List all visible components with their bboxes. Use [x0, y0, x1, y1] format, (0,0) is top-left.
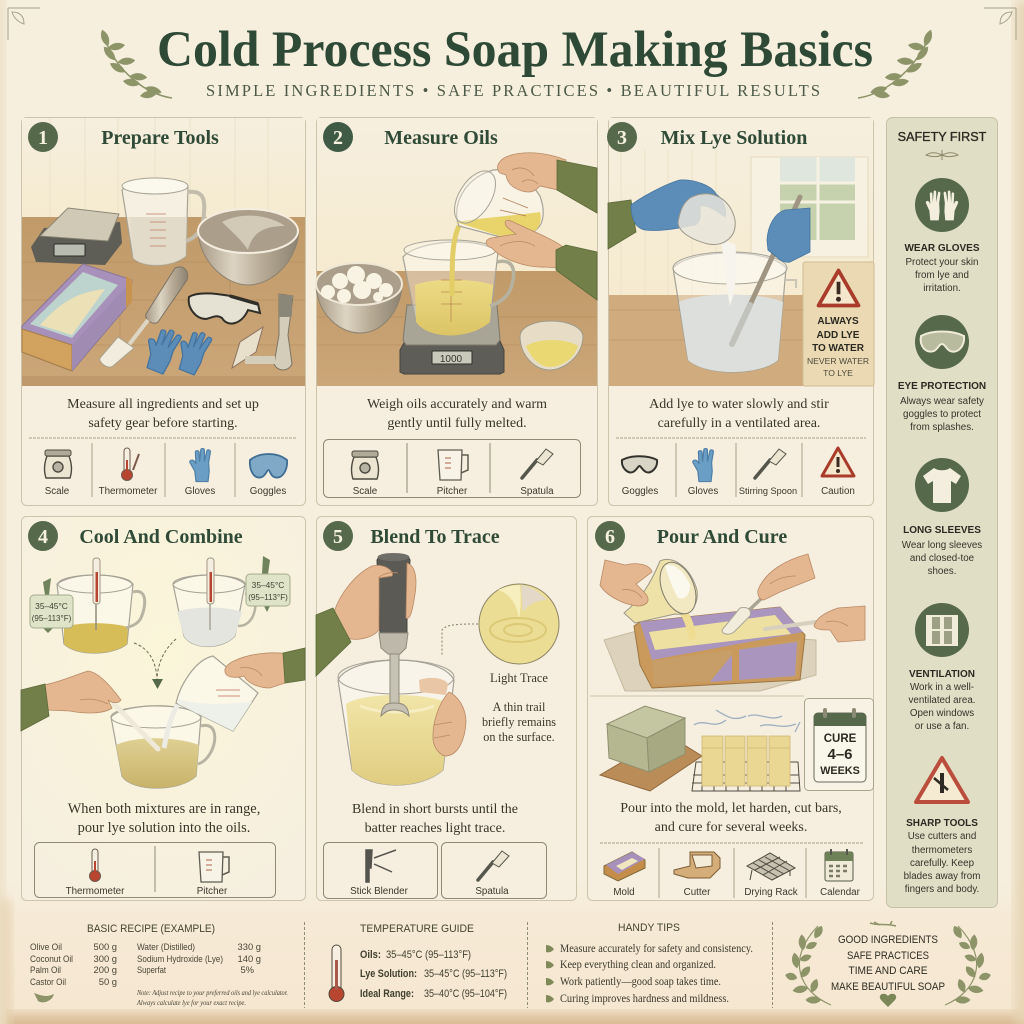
temperature ranges: Lye Solution: [360, 968, 417, 980]
measuring pitcher [403, 242, 498, 336]
section dividers [304, 922, 772, 1008]
caption: and cure for several weeks. [655, 820, 807, 835]
heading: Pour And Cure [657, 526, 787, 548]
temperature ranges: Ideal Range: [360, 988, 414, 1000]
oil stream [452, 226, 459, 296]
panel: safety first [886, 118, 998, 908]
caption: Blend in short bursts until the [352, 802, 518, 817]
oils list: 300 g [94, 953, 117, 964]
right glove [767, 208, 810, 262]
arrows [134, 639, 176, 689]
temperature ranges [360, 949, 507, 1000]
oils list: Castor Oil [30, 976, 66, 987]
illustration: weighing oil: 1000 [440, 354, 463, 365]
goggles [189, 293, 260, 324]
caption: When both mixtures are in range, [68, 801, 260, 817]
ornament [926, 150, 958, 160]
inset: light trace [479, 584, 559, 664]
tool row: Thermometer [66, 886, 125, 897]
stick blender [146, 267, 188, 323]
window [751, 157, 868, 257]
callout: always add lye to water [803, 262, 874, 386]
heading: Blend To Trace [370, 526, 500, 548]
heading: Mix Lye Solution [661, 127, 807, 149]
caption [67, 397, 259, 431]
safety: long sleeves: shoes. [928, 566, 956, 577]
wooden board [600, 735, 702, 791]
oils list: 200 g [94, 964, 117, 975]
lye pitcher [173, 575, 245, 646]
tool row [324, 842, 546, 898]
icon: thermometer [329, 945, 344, 1002]
step number 6: 6 [605, 526, 615, 548]
safety: eye protection: goggles to protect [903, 409, 981, 420]
pouring pitcher [624, 559, 697, 623]
tool row: Mold [613, 887, 635, 898]
icon: window ventilation [915, 603, 969, 657]
text: light trace: A thin trail [493, 700, 546, 714]
calendar: cure 4-6 weeks: WEEKS [820, 765, 860, 777]
pitcher [122, 179, 188, 265]
lye list: Water (Distilled) [137, 941, 195, 952]
safety: long sleeves [902, 525, 982, 577]
tool row: Pitcher [437, 486, 468, 497]
corner ornaments [8, 8, 1016, 40]
illustration: pouring into mold [600, 554, 865, 691]
panel: step 5 blend to trace [316, 516, 576, 900]
tips list [546, 943, 753, 1005]
sleeves [556, 160, 597, 300]
safety: long sleeves: and closed-toe [910, 553, 975, 564]
lower hand [486, 220, 563, 268]
lye list: Sodium Hydroxide (Lye) [137, 953, 223, 964]
safety: long sleeves: Wear long sleeves [902, 540, 982, 551]
small tools [274, 294, 293, 370]
laurel: title right [858, 29, 934, 99]
safety: wear gloves: Protect your skin [906, 257, 978, 268]
temperature tag right: 35–45°C [252, 580, 284, 590]
illustration: stick blender [316, 553, 559, 785]
caption: batter reaches light trace. [365, 821, 505, 836]
tool row: Spatula [520, 486, 554, 497]
small bowl of oil [520, 321, 583, 370]
safety: ventilation: ventilated area. [908, 695, 976, 706]
text: light trace: Light Trace [490, 671, 548, 685]
section: closing message: GOOD INGREDIENTS [838, 934, 938, 946]
section: closing message: MAKE BEAUTIFUL SOAP [831, 981, 945, 993]
panel: step 2 measure oils [316, 118, 598, 506]
tool row: Thermometer [99, 486, 158, 497]
mixing pitcher [111, 706, 201, 788]
steam squiggles [694, 710, 800, 732]
tool row: Pitcher [197, 886, 228, 897]
tool row: Gloves [185, 486, 215, 497]
pouring pitcher [457, 170, 543, 240]
step number 6 [595, 521, 625, 551]
illustration: weighing oil [316, 118, 597, 386]
recipe note: Always calculate lye for your exact recipe. [136, 999, 246, 1007]
section: closing message: TIME AND CARE [848, 965, 928, 977]
laurel: title left [99, 29, 172, 99]
tool row [324, 440, 580, 498]
safety: sharp tools [904, 818, 980, 895]
safety: sharp tools: Use cutters and [908, 831, 976, 842]
step number 2 [323, 122, 353, 152]
safety: ventilation [908, 669, 976, 732]
temperature tag right: (95–113°F) [248, 593, 288, 602]
lye stream [164, 704, 178, 748]
oils list: Coconut Oil [30, 953, 73, 964]
left hand [44, 671, 121, 713]
caption: Weigh oils accurately and warm [367, 397, 547, 412]
right hand [419, 678, 466, 756]
powder stream [721, 240, 736, 306]
caption: gently until fully melted. [387, 416, 527, 431]
dashed pointer [442, 624, 478, 656]
beaker of batter [338, 660, 454, 785]
callout: always add lye to water: ADD LYE [817, 330, 860, 341]
illustration: curing bars [600, 706, 800, 791]
caption: Measure all ingredients and set up [67, 397, 259, 412]
tips list: Measure accurately for safety and consistency. [560, 943, 753, 955]
oils list: Palm Oil [30, 964, 61, 975]
third hand and rod [765, 606, 865, 642]
recipe note: Note: Adjust recipe to your preferred oils and lye calculator. [136, 989, 288, 997]
illustration: combining mixtures [21, 556, 305, 788]
panel: step 4 cool and combine [21, 516, 306, 900]
tool row: Stirring Spoon [739, 486, 797, 496]
step number 2: 2 [333, 127, 343, 149]
left hand [600, 560, 652, 606]
icon: long sleeves shirt [915, 458, 969, 512]
tool row: Goggles [622, 486, 658, 497]
calendar: cure 4-6 weeks [804, 698, 874, 790]
caption: pour lye solution into the oils. [78, 820, 250, 836]
calendar: cure 4-6 weeks: CURE [824, 733, 857, 745]
step number 5: 5 [333, 526, 343, 548]
safety: sharp tools: fingers and body. [905, 884, 979, 895]
mold [22, 264, 132, 371]
calendar: cure 4-6 weeks: 4–6 [827, 746, 853, 763]
soap block [607, 706, 685, 772]
board [604, 630, 816, 691]
safety: eye protection [898, 381, 986, 433]
left hand [334, 563, 416, 639]
caption [68, 801, 260, 836]
safety: sharp tools: thermometers [912, 845, 972, 856]
tips list: Keep everything clean and organized. [560, 959, 716, 971]
laurel left [785, 925, 831, 1005]
left sleeve [21, 684, 49, 731]
lye list [137, 941, 261, 975]
safety: eye protection: from splashes. [910, 422, 974, 433]
oil pitcher [57, 575, 133, 653]
illustration: mixing lye [608, 118, 873, 386]
soap bars [702, 736, 790, 786]
step number 5 [323, 521, 353, 551]
panel: step 1 prepare tools [22, 118, 306, 506]
temperature tag left: 35–45°C [35, 601, 68, 611]
section: temperature guide [329, 923, 507, 1002]
tool row: Caution [821, 486, 855, 497]
bowl of solid oils [316, 286, 402, 333]
icon: sharp tools warning [916, 758, 968, 802]
step number 3: 3 [617, 127, 627, 149]
tool row [616, 438, 866, 497]
tips list: Work patiently—good soap takes time. [560, 976, 721, 988]
temperature tag left: (95–113°F) [32, 614, 72, 623]
temperature tag left [30, 578, 73, 633]
tool row [29, 438, 297, 497]
callout: always add lye to water: TO LYE [823, 368, 853, 378]
safety: ventilation: VENTILATION [909, 669, 975, 680]
text: light trace [482, 671, 556, 744]
safety: ventilation: Work in a well- [910, 682, 974, 693]
temperature ranges: Oils: [360, 949, 381, 961]
lye cup [678, 194, 735, 244]
caption [620, 801, 842, 835]
safety: eye protection: EYE PROTECTION [898, 381, 986, 392]
temperature ranges: 35–45°C (95–113°F) [386, 949, 471, 961]
spoon [732, 197, 800, 344]
caption [649, 397, 829, 431]
panel: step 3 mix lye [607, 118, 874, 506]
temperature ranges: 35–45°C (95–113°F) [424, 968, 507, 980]
sprig ornament [870, 921, 896, 926]
subtitle: SIMPLE INGREDIENTS • SAFE PRACTICES • BEAUTIFUL RESULTS [206, 81, 822, 100]
caption [367, 397, 547, 431]
upper hand [498, 153, 566, 192]
safety: ventilation: or use a fan. [915, 721, 969, 732]
safety: wear gloves: WEAR GLOVES [904, 243, 980, 254]
step number 1 [28, 122, 58, 152]
section: basic recipe [30, 923, 288, 1007]
caption: Add lye to water slowly and stir [649, 397, 829, 412]
laurel right [945, 925, 991, 1005]
section: closing message [785, 921, 991, 1007]
step number 3 [607, 122, 637, 152]
lye list: Superfat [137, 964, 166, 975]
lye list: 5% [240, 964, 254, 975]
divider [590, 695, 804, 697]
scale [31, 222, 122, 265]
step number 4: 4 [38, 526, 48, 548]
lye list: 330 g [238, 941, 261, 952]
tool row: Calendar [820, 887, 861, 898]
heading: SAFETY FIRST [898, 130, 987, 144]
safety: wear gloves: from lye and [915, 270, 969, 281]
recipe note [136, 989, 288, 1007]
caption: safety gear before starting. [88, 416, 238, 431]
digital scale [400, 341, 504, 374]
tool row [34, 842, 276, 898]
safety: sharp tools: blades away from [904, 871, 980, 882]
safety: ventilation: Open windows [910, 708, 974, 719]
right sleeve [283, 648, 305, 683]
safety: wear gloves: irritation. [923, 283, 961, 294]
caption: Pour into the mold, let harden, cut bars, [620, 801, 842, 816]
left arm and glove [608, 180, 726, 249]
stir stick [114, 704, 158, 749]
step number 4 [28, 521, 58, 551]
tool row [600, 843, 864, 898]
caption [352, 802, 518, 836]
sprig [34, 993, 54, 1002]
oils list: 50 g [99, 976, 117, 987]
tips list: Curing improves hardness and mildness. [560, 993, 729, 1005]
temperature tag right [246, 556, 290, 612]
icon: heart [880, 994, 896, 1007]
callout: always add lye to water: ALWAYS [817, 316, 859, 327]
caption: carefully in a ventilated area. [658, 416, 820, 431]
section: closing message: SAFE PRACTICES [847, 950, 929, 962]
mold [634, 607, 805, 688]
lye list: 140 g [238, 953, 261, 964]
right hand [225, 653, 288, 688]
tool row: Cutter [684, 887, 711, 898]
heading: Cool And Combine [79, 526, 243, 548]
bowl [198, 232, 299, 285]
title: Cold Process Soap Making Basics [157, 22, 873, 78]
section: handy tips: HANDY TIPS [618, 922, 680, 934]
oils list: Olive Oil [30, 941, 62, 952]
beaker [673, 253, 786, 372]
pouring pitcher [176, 656, 258, 731]
step number 1: 1 [38, 127, 48, 149]
illustration: tools on table [22, 118, 305, 386]
safety: eye protection: Always wear safety [900, 396, 984, 407]
sleeve [316, 608, 351, 676]
section: basic recipe: BASIC RECIPE (EXAMPLE) [87, 923, 215, 935]
blender body [377, 553, 410, 716]
tool row: Stick Blender [350, 886, 409, 897]
text: light trace: briefly remains [482, 715, 556, 729]
tool row: Scale [353, 486, 378, 497]
safety: wear gloves [904, 243, 980, 294]
icon: goggles [915, 315, 969, 369]
batter stream [671, 600, 692, 636]
text: light trace: on the surface. [483, 730, 555, 744]
temperature ranges: 35–40°C (95–104°F) [424, 988, 507, 1000]
cooling rack [692, 762, 800, 791]
tool row: Spatula [475, 886, 509, 897]
callout: always add lye to water: NEVER WATER [807, 356, 869, 366]
safety: long sleeves: LONG SLEEVES [903, 525, 981, 536]
gloves [139, 324, 183, 375]
panel: step 6 pour and cure [588, 516, 874, 900]
section: temperature guide: TEMPERATURE GUIDE [360, 923, 474, 935]
icon: gloves [915, 178, 969, 232]
safety: sharp tools: carefully. Keep [910, 858, 975, 869]
tool row: Goggles [250, 486, 286, 497]
tool row: Scale [45, 486, 70, 497]
right hand and spatula [722, 554, 815, 634]
oils list: 500 g [94, 941, 117, 952]
tool row: Gloves [688, 486, 718, 497]
heading: Prepare Tools [101, 127, 219, 149]
callout: always add lye to water: TO WATER [812, 343, 865, 354]
section: handy tips [546, 922, 753, 1005]
oils list [30, 941, 117, 987]
heading: Measure Oils [384, 127, 498, 149]
safety: sharp tools: SHARP TOOLS [906, 818, 978, 829]
tool row: Drying Rack [744, 887, 798, 898]
